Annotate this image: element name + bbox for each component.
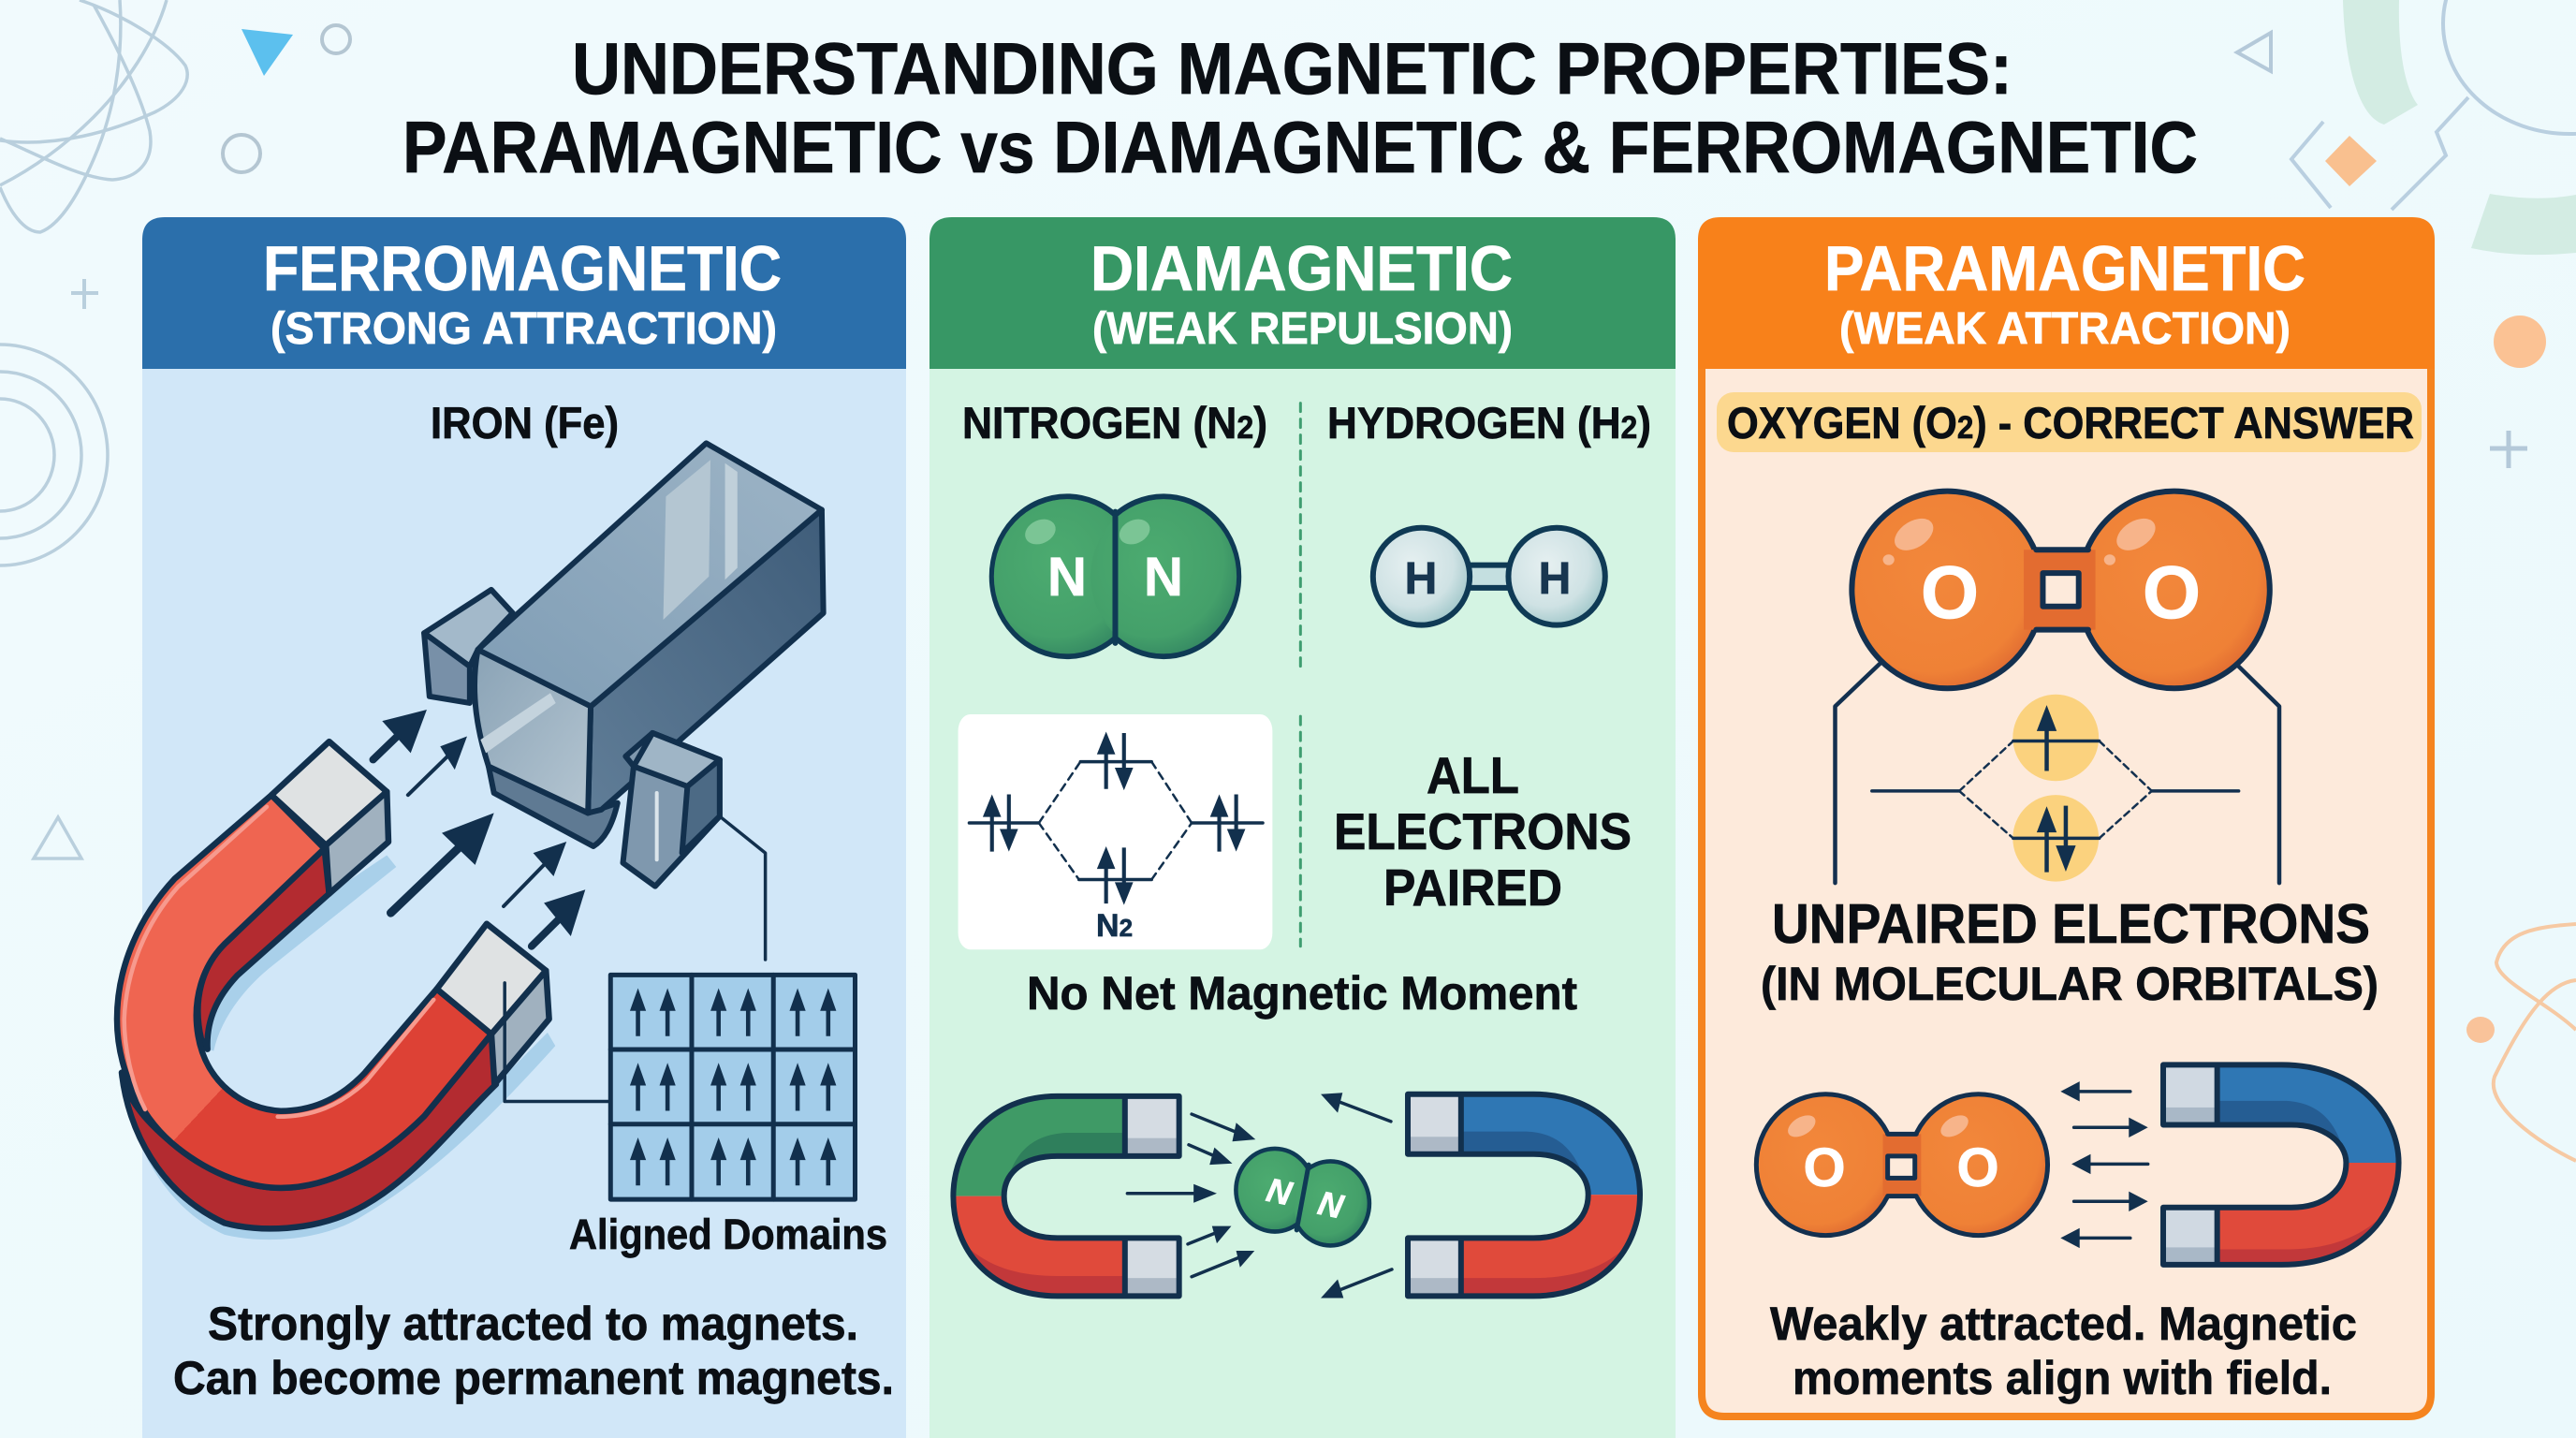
title: PARAMAGNETIC vs DIAMAGNETIC & FERROMAGNETIC	[402, 106, 2198, 188]
callout: all electrons paired	[1334, 746, 1632, 917]
attraction arrows	[373, 710, 585, 946]
repelling magnet: left	[953, 1096, 1179, 1296]
horseshoe magnet	[117, 741, 555, 1240]
atom label: small O left: O	[1803, 1137, 1846, 1198]
illustrations: diamagnetic molecules and magnets	[953, 404, 1640, 1298]
iron bar	[424, 443, 824, 887]
magnet shadow	[124, 856, 555, 1240]
description: paramagnetic: Weakly attracted. Magnetic	[1770, 1298, 2357, 1350]
header: diamagnetic: (WEAK REPULSION)	[1092, 304, 1513, 354]
decor: right shapes	[2237, 0, 2576, 1161]
atom label: O right: O	[2143, 550, 2201, 634]
field arrows	[2060, 1081, 2148, 1248]
molecular orbital diagram: O2	[1872, 695, 2239, 882]
highlight: oxygen correct answer: OXYGEN (O2) - CORRECT ANSWER	[1727, 398, 2414, 448]
small nitrogen molecule	[1237, 1149, 1369, 1245]
panel: diamagnetic	[929, 217, 1676, 1438]
atom label: N right: N	[1144, 547, 1183, 608]
atom label: small N left: N	[1264, 1170, 1296, 1213]
decor: blue triangle	[242, 29, 293, 76]
nitrogen molecule	[992, 496, 1238, 656]
header: diamagnetic	[929, 217, 1676, 369]
label: nitrogen: NITROGEN (N2)	[962, 398, 1267, 448]
atom label: N left: N	[1047, 547, 1087, 608]
callout: all electrons paired: ELECTRONS	[1334, 802, 1632, 860]
header: paramagnetic: PARAMAGNETIC	[1824, 233, 2305, 304]
panel body: diamagnetic	[929, 356, 1676, 1438]
connector lines	[505, 816, 766, 1102]
label: N2 orbital diagram: N2	[1096, 908, 1133, 944]
label: no net magnetic moment: No Net Magnetic Moment	[1027, 967, 1577, 1020]
decor: left orbits and shapes	[0, 0, 350, 858]
panel: ferromagnetic	[117, 217, 906, 1438]
panel body: ferromagnetic	[142, 356, 906, 1438]
callout: all electrons paired: ALL	[1427, 746, 1519, 804]
molecular orbital diagram: N2	[959, 714, 1272, 949]
atom label: small N right: N	[1315, 1183, 1348, 1226]
oxygen molecule: large	[1852, 492, 2270, 688]
illustrations: paramagnetic molecules and magnet	[1756, 492, 2399, 1265]
header: paramagnetic: (WEAK ATTRACTION)	[1839, 304, 2291, 354]
title: UNDERSTANDING MAGNETIC PROPERTIES:	[572, 27, 2012, 110]
repulsion arrows	[1127, 1093, 1392, 1298]
description: ferromagnetic: Can become permanent magnets.	[173, 1352, 894, 1404]
repelling magnet: right	[1408, 1094, 1640, 1296]
atom label: O left: O	[1921, 550, 1979, 634]
leader lines	[1836, 663, 2279, 883]
callout: all electrons paired: PAIRED	[1383, 858, 1562, 917]
label: iron: IRON (Fe)	[431, 398, 619, 448]
atom label: H left: H	[1405, 554, 1437, 604]
header: ferromagnetic: FERROMAGNETIC	[263, 233, 782, 304]
label: aligned domains: Aligned Domains	[569, 1211, 887, 1258]
description: paramagnetic	[1770, 1298, 2357, 1404]
header: diamagnetic: DIAMAGNETIC	[1090, 233, 1513, 304]
atom label: H right: H	[1539, 554, 1571, 604]
panel body: paramagnetic	[1702, 356, 2431, 1416]
illustration: iron bar and domains	[373, 443, 855, 1199]
atom label: small O right: O	[1956, 1137, 1999, 1198]
header: paramagnetic	[1698, 217, 2435, 369]
title	[402, 27, 2198, 188]
oxygen molecule: small	[1756, 1094, 2048, 1236]
description: paramagnetic: moments align with field.	[1793, 1352, 2332, 1404]
label: hydrogen: HYDROGEN (H2)	[1327, 398, 1651, 448]
magnet	[2163, 1064, 2399, 1265]
description: ferromagnetic	[173, 1298, 894, 1404]
header: ferromagnetic: (STRONG ATTRACTION)	[271, 304, 777, 354]
hydrogen molecule	[1373, 528, 1605, 625]
callout: unpaired electrons: (IN MOLECULAR ORBITALS)	[1761, 958, 2378, 1010]
domain grid	[610, 975, 855, 1199]
callout: unpaired electrons	[1761, 893, 2378, 1010]
callout: unpaired electrons: UNPAIRED ELECTRONS	[1772, 893, 2370, 955]
header: ferromagnetic	[142, 217, 906, 369]
description: ferromagnetic: Strongly attracted to magnets.	[208, 1298, 858, 1350]
divider	[1299, 404, 1302, 946]
panel: paramagnetic	[1698, 217, 2435, 1416]
